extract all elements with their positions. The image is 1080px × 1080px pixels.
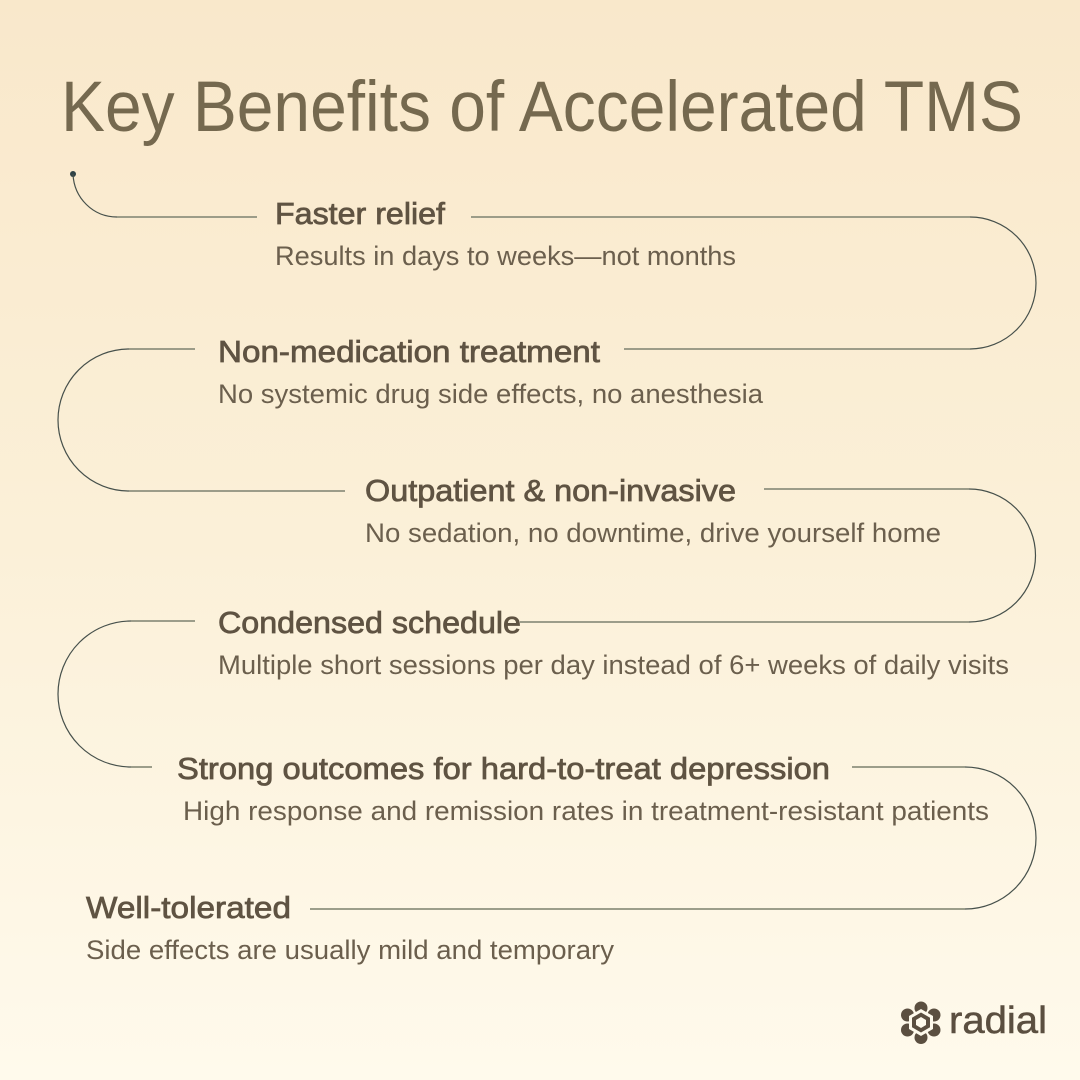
- benefit: faster relief: [275, 196, 736, 271]
- benefit: well-tolerated: [86, 890, 615, 965]
- benefit: condensed schedule: Condensed schedule: [218, 605, 521, 640]
- benefit: condensed schedule: [218, 605, 1009, 680]
- logo: radial: [901, 1000, 1047, 1044]
- benefit: strong outcomes: High response and remission rates in treatment-resistant patients: [183, 796, 989, 826]
- benefit: non-medication treatment: Non-medication treatment: [218, 334, 600, 369]
- icon: radial flower mark: [901, 1002, 940, 1044]
- benefit: well-tolerated: Well-tolerated: [86, 890, 291, 925]
- wordmark: radial: [949, 1000, 1047, 1042]
- benefit: strong outcomes: Strong outcomes for hard-to-treat depression: [177, 751, 830, 786]
- connector path: [58, 171, 1036, 909]
- benefit: well-tolerated: Side effects are usually mild and temporary: [86, 935, 615, 965]
- benefit: outpatient and non-invasive: Outpatient & non-invasive: [365, 473, 736, 508]
- benefit: non-medication treatment: [218, 334, 764, 409]
- benefit: non-medication treatment: No systemic drug side effects, no anesthesia: [218, 379, 764, 409]
- benefit: outpatient and non-invasive: No sedation, no downtime, drive yourself home: [365, 518, 941, 548]
- title: Key Benefits of Accelerated TMS: [61, 68, 1023, 147]
- benefit: strong outcomes: [177, 751, 989, 826]
- benefit: faster relief: Faster relief: [275, 196, 445, 231]
- benefit: outpatient and non-invasive: [365, 473, 941, 548]
- benefit: condensed schedule: Multiple short sessions per day instead of 6+ weeks of daily visits: [218, 650, 1009, 680]
- benefit: faster relief: Results in days to weeks—not months: [275, 241, 736, 271]
